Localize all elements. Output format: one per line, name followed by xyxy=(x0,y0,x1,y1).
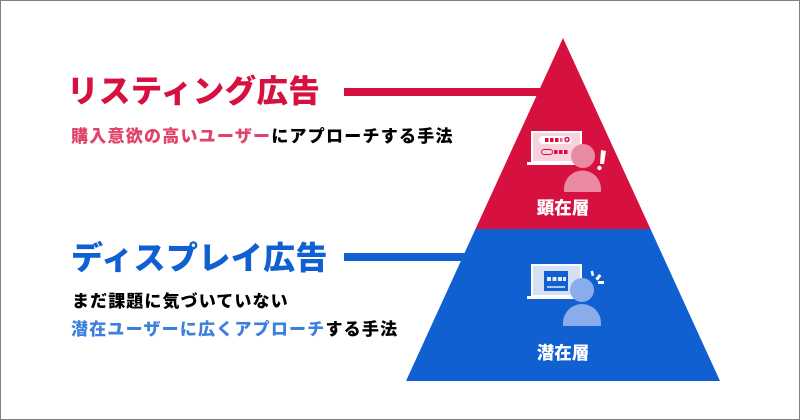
connector line: listing ads xyxy=(344,88,549,96)
text block: listing description: 購入意欲の高いユーザーにアプローチする手法 xyxy=(71,126,454,146)
pyramid bottom: blue tier xyxy=(406,229,720,381)
icon: person at laptop noticing search result xyxy=(527,132,606,192)
connector line: display ads xyxy=(344,253,469,261)
heading: display ads: ディスプレイ広告 xyxy=(71,240,328,276)
pyramid top: red tier xyxy=(476,38,650,229)
label: manifest layer: 顕在層 xyxy=(537,198,589,218)
text block: display description line 1: まだ課題に気づいていない xyxy=(72,291,289,311)
label: latent layer: 潜在層 xyxy=(537,343,589,363)
icon: person at laptop not yet noticing xyxy=(527,265,604,326)
text block: display description line 2: 潜在ユーザーに広くアプローチする手法 xyxy=(71,319,398,339)
heading: listing ads: リスティング広告 xyxy=(67,73,320,109)
